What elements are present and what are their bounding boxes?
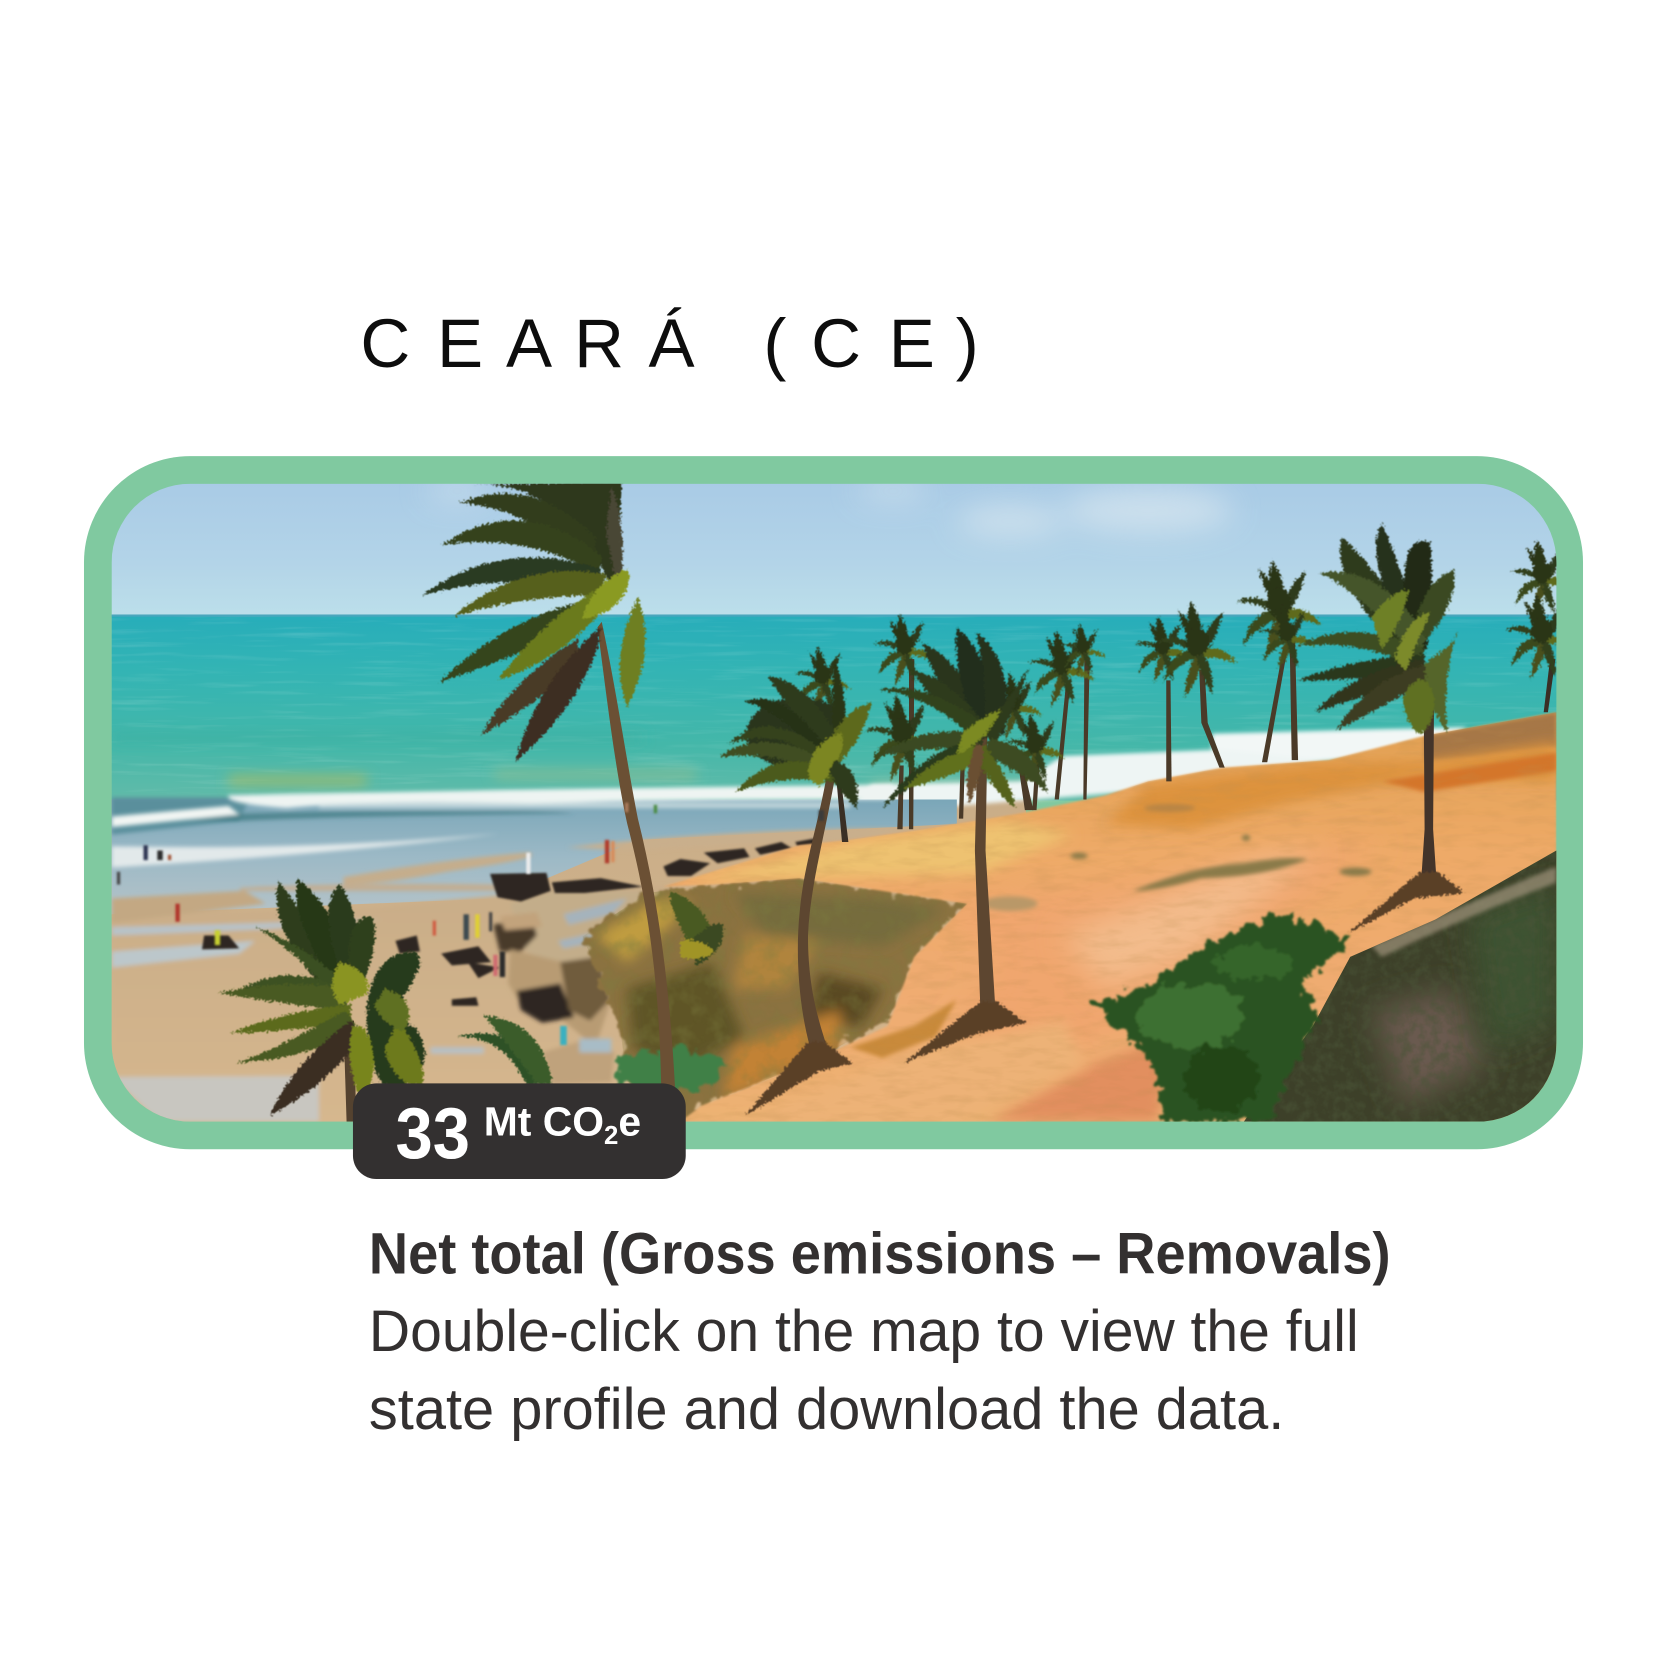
rocks xyxy=(202,838,819,1006)
small distant palms xyxy=(794,540,1578,785)
big foreground palm xyxy=(422,481,645,761)
small green palm on sand xyxy=(457,1015,553,1084)
photo: Ceará beach with palm trees xyxy=(112,481,1578,1122)
beachgoers xyxy=(117,803,824,1045)
description text xyxy=(369,1299,1359,1442)
near water xyxy=(112,799,957,914)
clouds xyxy=(425,483,1233,536)
rocky ledge xyxy=(492,896,628,1084)
dune colour bands xyxy=(680,712,1556,1122)
sea ripples xyxy=(112,617,1556,797)
cliff texture xyxy=(582,878,949,1102)
badge background xyxy=(353,1083,686,1179)
sky xyxy=(112,484,1556,617)
far shore foam xyxy=(1212,727,1467,770)
sand texture xyxy=(688,740,1542,1119)
badge unit: Mt CO xyxy=(484,1098,603,1144)
description heading: Net total (Gross emissions – Removals) xyxy=(369,1222,1391,1287)
green bush xyxy=(1090,914,1348,1122)
bottom-left palm xyxy=(218,878,375,1115)
panel: green photo frame xyxy=(84,456,1583,1149)
small cliff palm xyxy=(670,891,723,965)
dune xyxy=(663,712,1556,1122)
sea xyxy=(112,614,1556,801)
palm root flares xyxy=(744,872,1465,1116)
badge value: 33 xyxy=(395,1094,470,1174)
mid palm xyxy=(720,659,872,808)
description text: Double-click on the map to view the full xyxy=(369,1299,1359,1364)
title: CEARÁ (CE) xyxy=(360,304,979,382)
secondary palm at bottom left xyxy=(367,952,425,1087)
dry grass patches xyxy=(982,804,1371,911)
wet sand base xyxy=(112,799,1026,1122)
callout: emissions badge xyxy=(353,1083,686,1179)
cliff vegetation xyxy=(583,878,967,1122)
central palm xyxy=(875,627,1047,808)
green shrub on cliff xyxy=(614,1047,729,1090)
badge unit: e xyxy=(618,1098,641,1144)
beach sand xyxy=(112,828,911,1122)
description text: state profile and download the data. xyxy=(369,1377,1284,1442)
dark vegetation bottom right xyxy=(1244,851,1556,1122)
right palm xyxy=(1297,523,1457,734)
palm trunks xyxy=(343,622,1555,1122)
surf waves xyxy=(112,785,893,868)
shallow water band xyxy=(224,736,1046,800)
badge unit: 2 xyxy=(604,1122,618,1150)
